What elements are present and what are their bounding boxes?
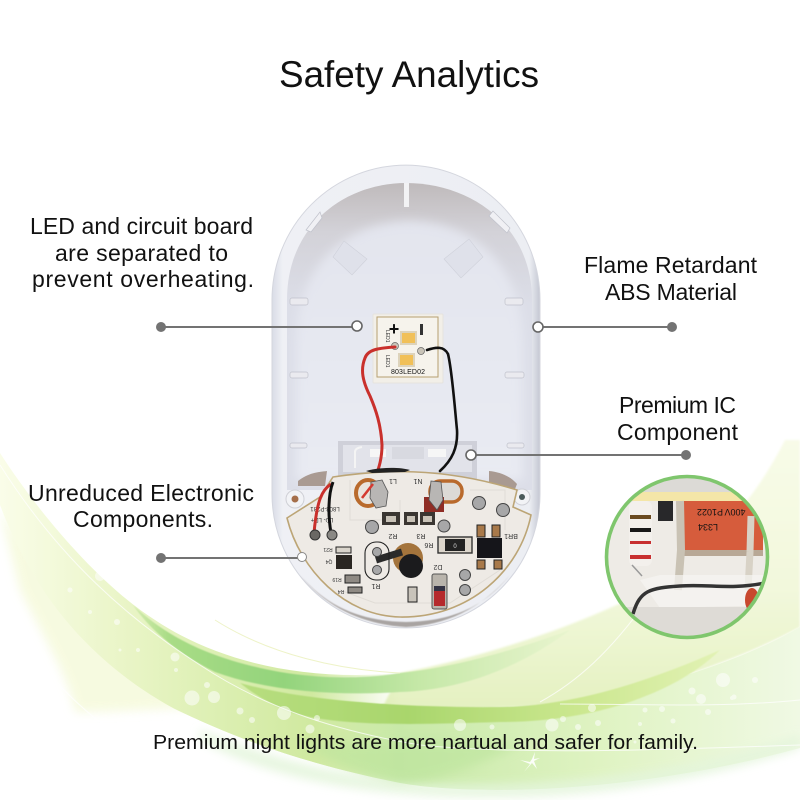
star glint	[520, 752, 540, 772]
solder blobs	[366, 496, 510, 596]
shell inner floor	[296, 221, 523, 480]
top wall notch	[404, 183, 409, 207]
D2 diode	[432, 574, 447, 609]
title: Safety Analytics	[279, 54, 539, 95]
text: premium IC: Premium IC	[619, 392, 736, 418]
wave: thin strand	[215, 620, 400, 673]
text: LED separation: prevent overheating.	[32, 266, 254, 292]
text: LED separation	[30, 213, 254, 292]
text: LED separation: are separated to	[55, 240, 228, 266]
silkscreen labels: L803-P281	[310, 505, 340, 511]
silkscreen labels: R4	[338, 588, 344, 594]
wave: pale right wedge	[380, 440, 800, 712]
text: unreduced components	[28, 480, 254, 532]
board traces	[340, 480, 505, 603]
capacitor print: P1022	[697, 507, 723, 517]
inset photo contents	[608, 478, 766, 636]
silkscreen labels: BR1	[504, 532, 518, 539]
resistor	[629, 501, 652, 566]
R6 resistor	[438, 537, 472, 553]
leader line: LED	[156, 321, 362, 332]
text: flame retardant	[584, 252, 758, 305]
red wire hint	[745, 588, 758, 608]
capacitor print: L334	[698, 522, 718, 532]
background: green waves	[0, 440, 800, 797]
wave: pale left veil	[0, 510, 200, 712]
inset: component close-up	[604, 474, 770, 640]
white base shapes	[640, 575, 764, 607]
callout: unreduced components	[28, 480, 306, 563]
sparkles	[68, 571, 758, 744]
leader line: premium IC	[466, 450, 691, 460]
product: night light shell	[272, 165, 540, 628]
small SMD parts	[336, 547, 417, 602]
wave: main left swoosh	[0, 453, 400, 783]
R6 resistor: 0	[453, 544, 457, 550]
silkscreen labels: D2	[433, 563, 442, 570]
wires above board	[363, 347, 395, 476]
black part	[658, 501, 673, 521]
silkscreen labels	[310, 477, 518, 594]
text: premium IC	[617, 392, 739, 445]
leader line: flame retardant	[533, 322, 677, 332]
silkscreen labels: R19	[332, 576, 342, 582]
adhesive pads	[333, 239, 483, 278]
text: flame retardant: Flame Retardant	[584, 252, 758, 278]
wires on board	[314, 484, 331, 533]
wall clips	[290, 211, 524, 448]
shell bottom rim	[300, 575, 510, 627]
shell outer body	[272, 165, 540, 628]
silkscreen labels: Q4	[325, 558, 332, 564]
text: flame retardant: ABS Material	[605, 279, 737, 305]
capacitor print	[697, 509, 746, 530]
circuit board	[287, 468, 531, 617]
R1 inductor	[365, 542, 423, 580]
text: premium IC: Component	[617, 419, 739, 445]
wave: light strands	[0, 465, 800, 751]
wave: bottom mint fade	[200, 730, 800, 797]
text: unreduced components: Components.	[73, 506, 213, 532]
coil pads	[356, 480, 380, 506]
callout: premium IC	[466, 392, 739, 460]
text: LED separation: LED and circuit board	[30, 213, 253, 239]
silk LED labels second: LED1	[384, 355, 390, 368]
polarity marks: +	[389, 319, 399, 339]
metal leads	[678, 501, 681, 590]
capacitor print: 400V	[724, 507, 746, 517]
silkscreen labels: R1	[371, 582, 380, 589]
screw bosses	[286, 490, 304, 508]
leader line: components	[156, 552, 306, 563]
silkscreen labels: R6	[424, 541, 433, 548]
text: unreduced components: Unreduced Electronic	[28, 480, 254, 506]
wave: middle green band	[240, 650, 720, 724]
board code: 803LED02	[391, 369, 425, 376]
callout: LED and circuit board	[30, 213, 362, 332]
silkscreen labels: R3	[416, 532, 425, 539]
silkscreen labels: R21	[323, 546, 333, 552]
shell inner wall	[287, 183, 532, 490]
wave: lower base band	[173, 627, 800, 790]
silkscreen labels: N1	[413, 477, 422, 484]
BR1 bridge	[477, 525, 502, 569]
LED chips	[400, 331, 417, 345]
inset green ring	[606, 476, 768, 638]
bracket	[338, 441, 477, 480]
callout: flame retardant	[533, 252, 758, 332]
shell slots	[298, 471, 327, 486]
black wire	[633, 583, 765, 614]
R2 R3 parts	[382, 512, 435, 525]
LED board	[373, 314, 443, 383]
footer caption: Premium night lights are more nartual and safer for family.	[153, 731, 698, 754]
wave: bright upper strip	[133, 605, 570, 693]
silkscreen labels: L1	[389, 477, 397, 484]
board dark contact shadow	[366, 468, 410, 473]
solder points	[392, 342, 398, 350]
silkscreen labels: R2	[388, 532, 397, 539]
input solder	[370, 480, 388, 508]
silkscreen labels: LD- LD+	[310, 516, 333, 522]
wave: lower darker fold	[300, 741, 520, 783]
silk LED labels: LED1	[384, 330, 390, 343]
dark red patch	[424, 497, 444, 512]
